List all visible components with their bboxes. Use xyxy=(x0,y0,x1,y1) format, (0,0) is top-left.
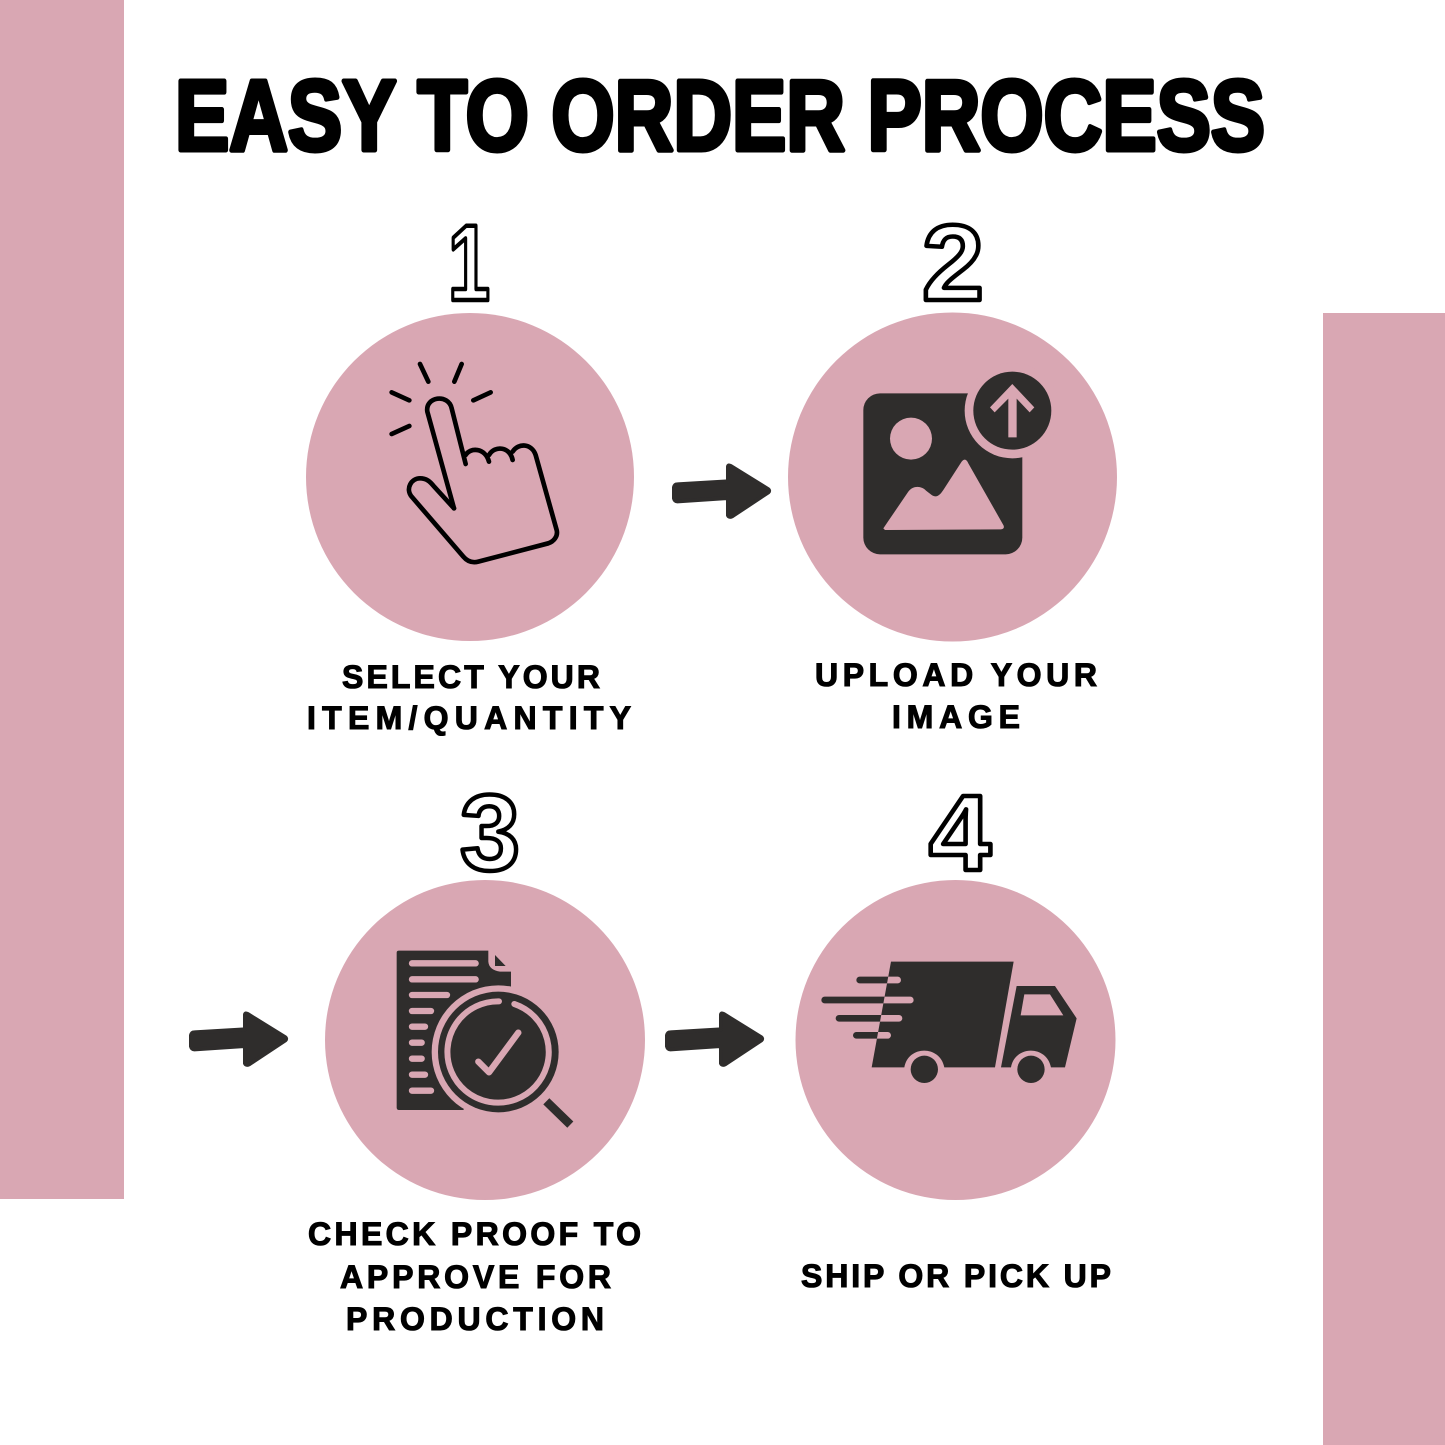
icon: pointing hand xyxy=(392,364,557,562)
step 1 xyxy=(306,202,634,736)
step 1 number: 1 xyxy=(448,202,490,323)
step 3 label: APPROVE FOR xyxy=(340,1259,611,1295)
step 3 label: CHECK PROOF TO xyxy=(308,1216,641,1252)
step 3 label: PRODUCTION xyxy=(346,1301,604,1337)
right pink bar xyxy=(1323,313,1445,1445)
step 3 label xyxy=(308,1216,641,1337)
icon: delivery truck xyxy=(825,962,1077,1083)
step 2 xyxy=(788,202,1117,735)
arrow: step 1 to step 2 xyxy=(674,465,769,517)
step 1 label xyxy=(307,659,631,736)
step 4 circle xyxy=(796,880,1116,1200)
step 1 circle xyxy=(306,313,634,641)
icon: image upload xyxy=(863,363,1060,554)
step 1 label: ITEM/QUANTITY xyxy=(307,700,631,736)
step 4 xyxy=(796,772,1116,1294)
step 2 circle xyxy=(788,312,1117,642)
arrow: into step 3 xyxy=(191,1013,286,1065)
arrow: step 3 to step 4 xyxy=(667,1013,762,1065)
step 4 number: 4 xyxy=(929,772,991,893)
step 4 label: SHIP OR PICK UP xyxy=(801,1258,1111,1294)
step 1 label: SELECT YOUR xyxy=(342,659,600,695)
step 3 number: 3 xyxy=(460,772,520,893)
step 2 label: UPLOAD YOUR xyxy=(815,657,1097,693)
step 2 number: 2 xyxy=(922,202,984,323)
icon: document with magnifier xyxy=(397,951,570,1125)
step 3 xyxy=(308,772,645,1337)
step 2 label xyxy=(815,657,1097,735)
step 3 circle xyxy=(325,880,645,1200)
left pink bar xyxy=(0,0,124,1199)
step 2 label: IMAGE xyxy=(892,699,1020,735)
